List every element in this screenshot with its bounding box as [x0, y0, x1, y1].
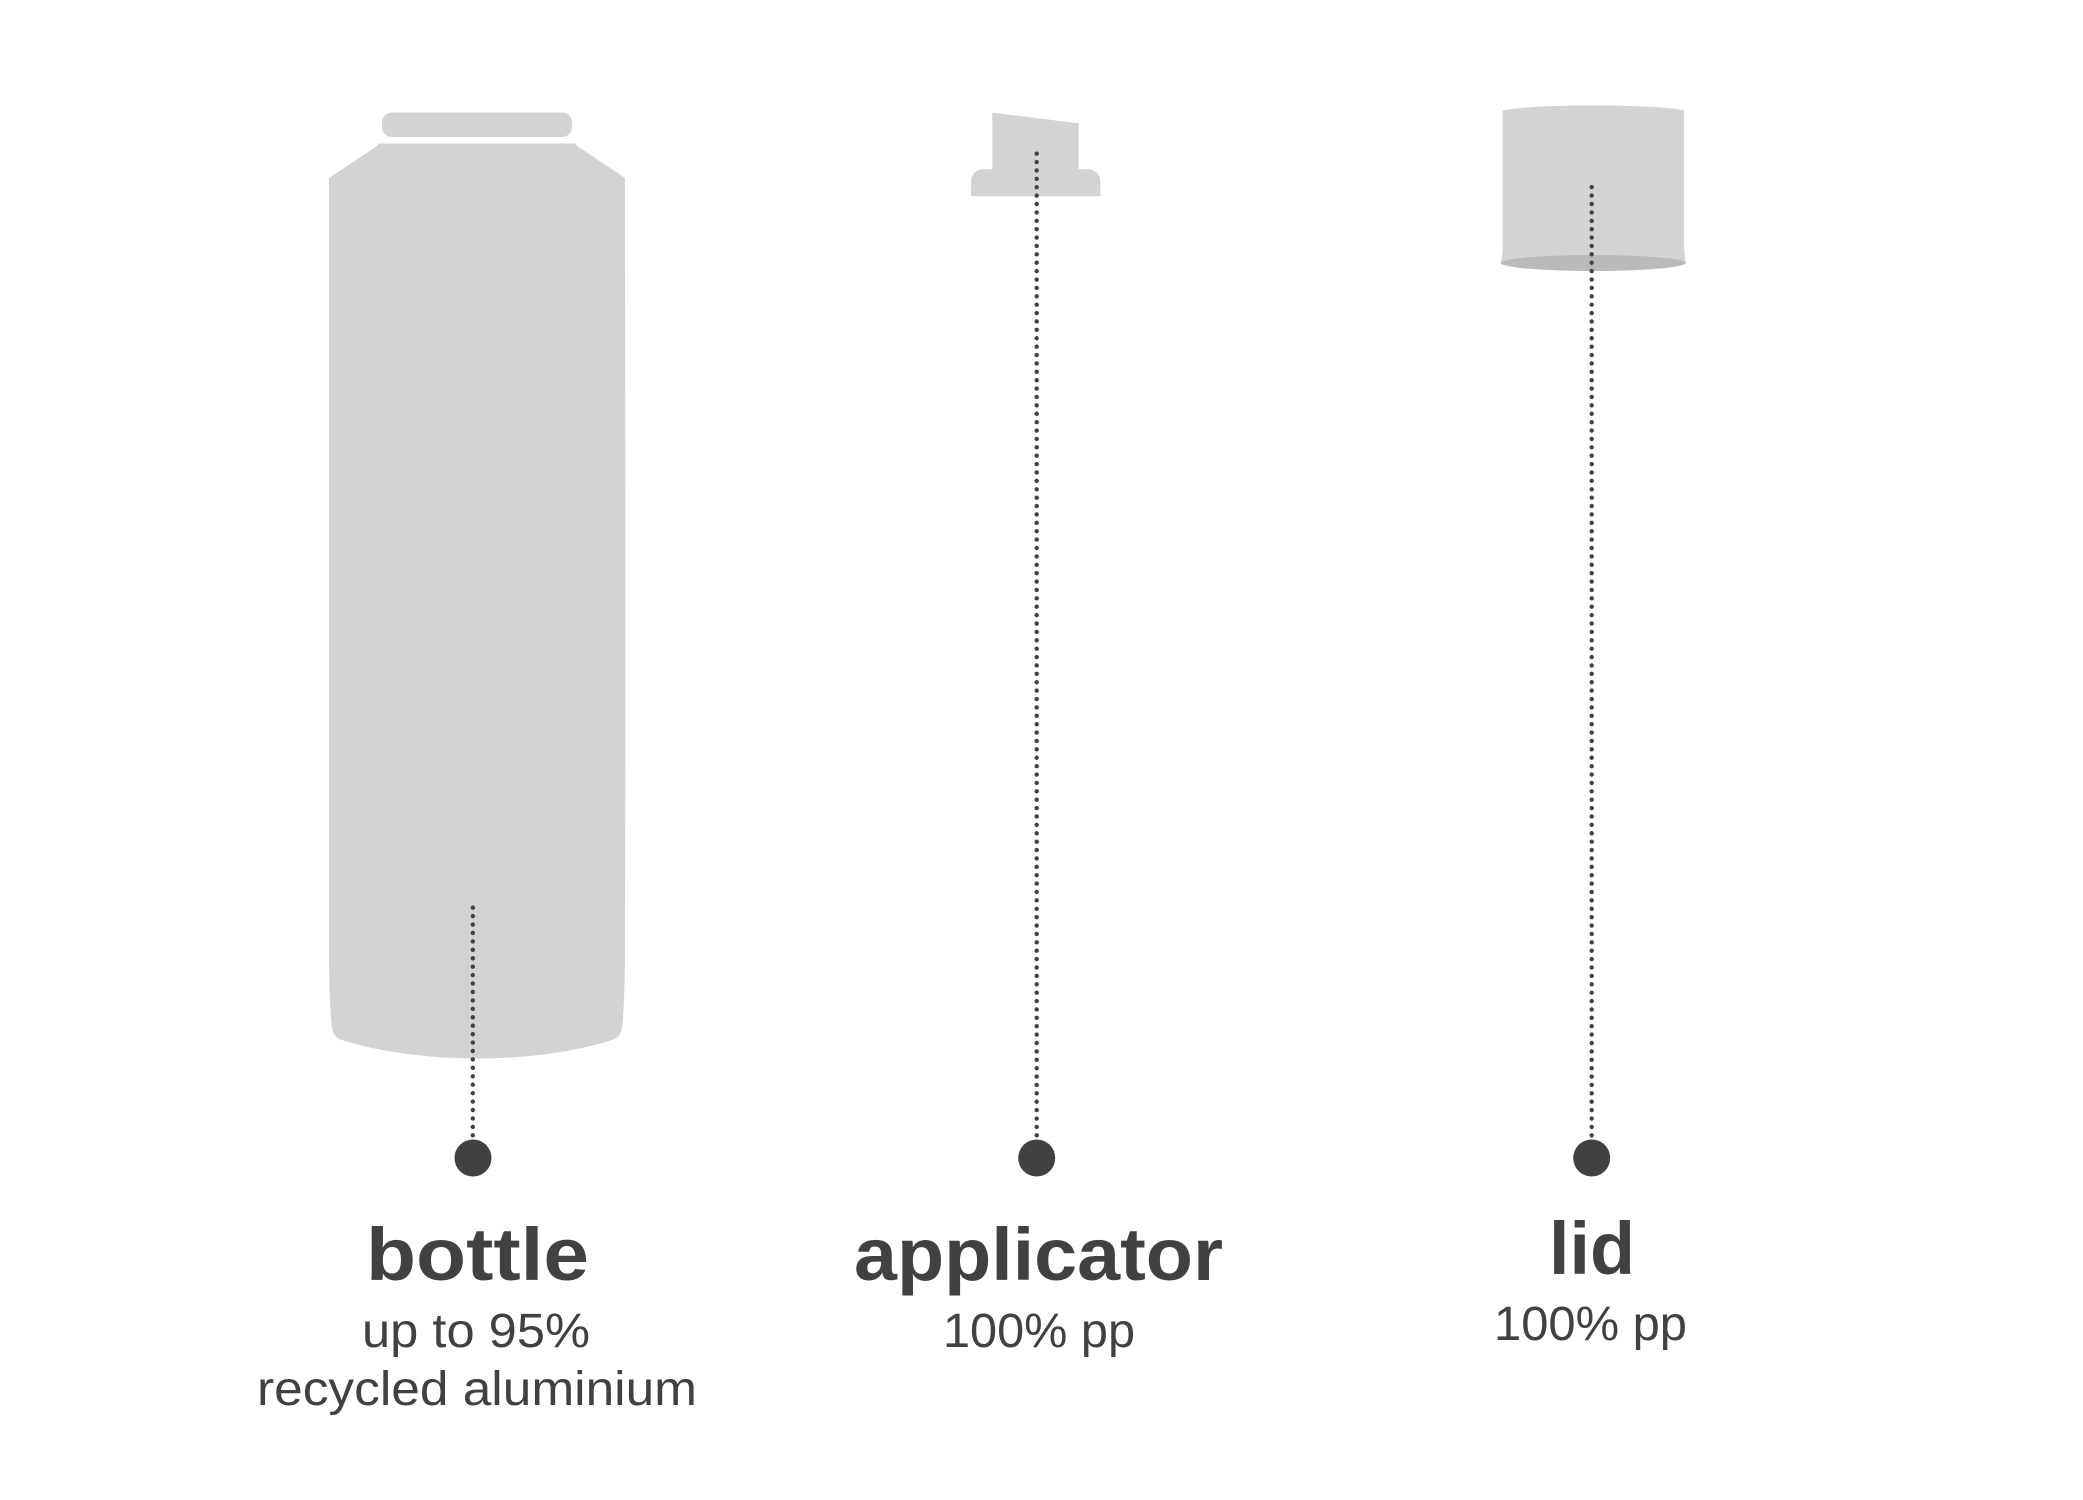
text: bottle material — [257, 1305, 697, 1416]
text: bottle material: recycled aluminium — [257, 1363, 697, 1416]
panel: applicator — [854, 113, 1223, 1358]
heading: applicator: applicator — [854, 1213, 1223, 1296]
panel: lid — [1494, 106, 1687, 1351]
icon: lid base ellipse — [1501, 255, 1686, 271]
icon: applicator — [971, 113, 1100, 196]
marker dot: applicator — [1018, 1140, 1055, 1176]
text: bottle material: up to 95% — [362, 1305, 590, 1358]
icon: bottle cap ring — [382, 112, 572, 137]
text: applicator material: 100% pp — [943, 1305, 1135, 1358]
text: lid material: 100% pp — [1494, 1298, 1687, 1351]
panel: bottle — [257, 112, 697, 1416]
dotted leader: applicator — [1034, 153, 1039, 1135]
dotted leader: lid — [1589, 186, 1594, 1135]
dotted leader: bottle — [471, 906, 475, 1135]
heading: lid: lid — [1549, 1207, 1635, 1290]
marker dot: lid — [1573, 1140, 1610, 1176]
icon: bottle body — [329, 144, 626, 1058]
heading: bottle: bottle — [366, 1213, 589, 1296]
marker dot: bottle — [454, 1140, 492, 1176]
icon: lid body — [1501, 106, 1686, 262]
